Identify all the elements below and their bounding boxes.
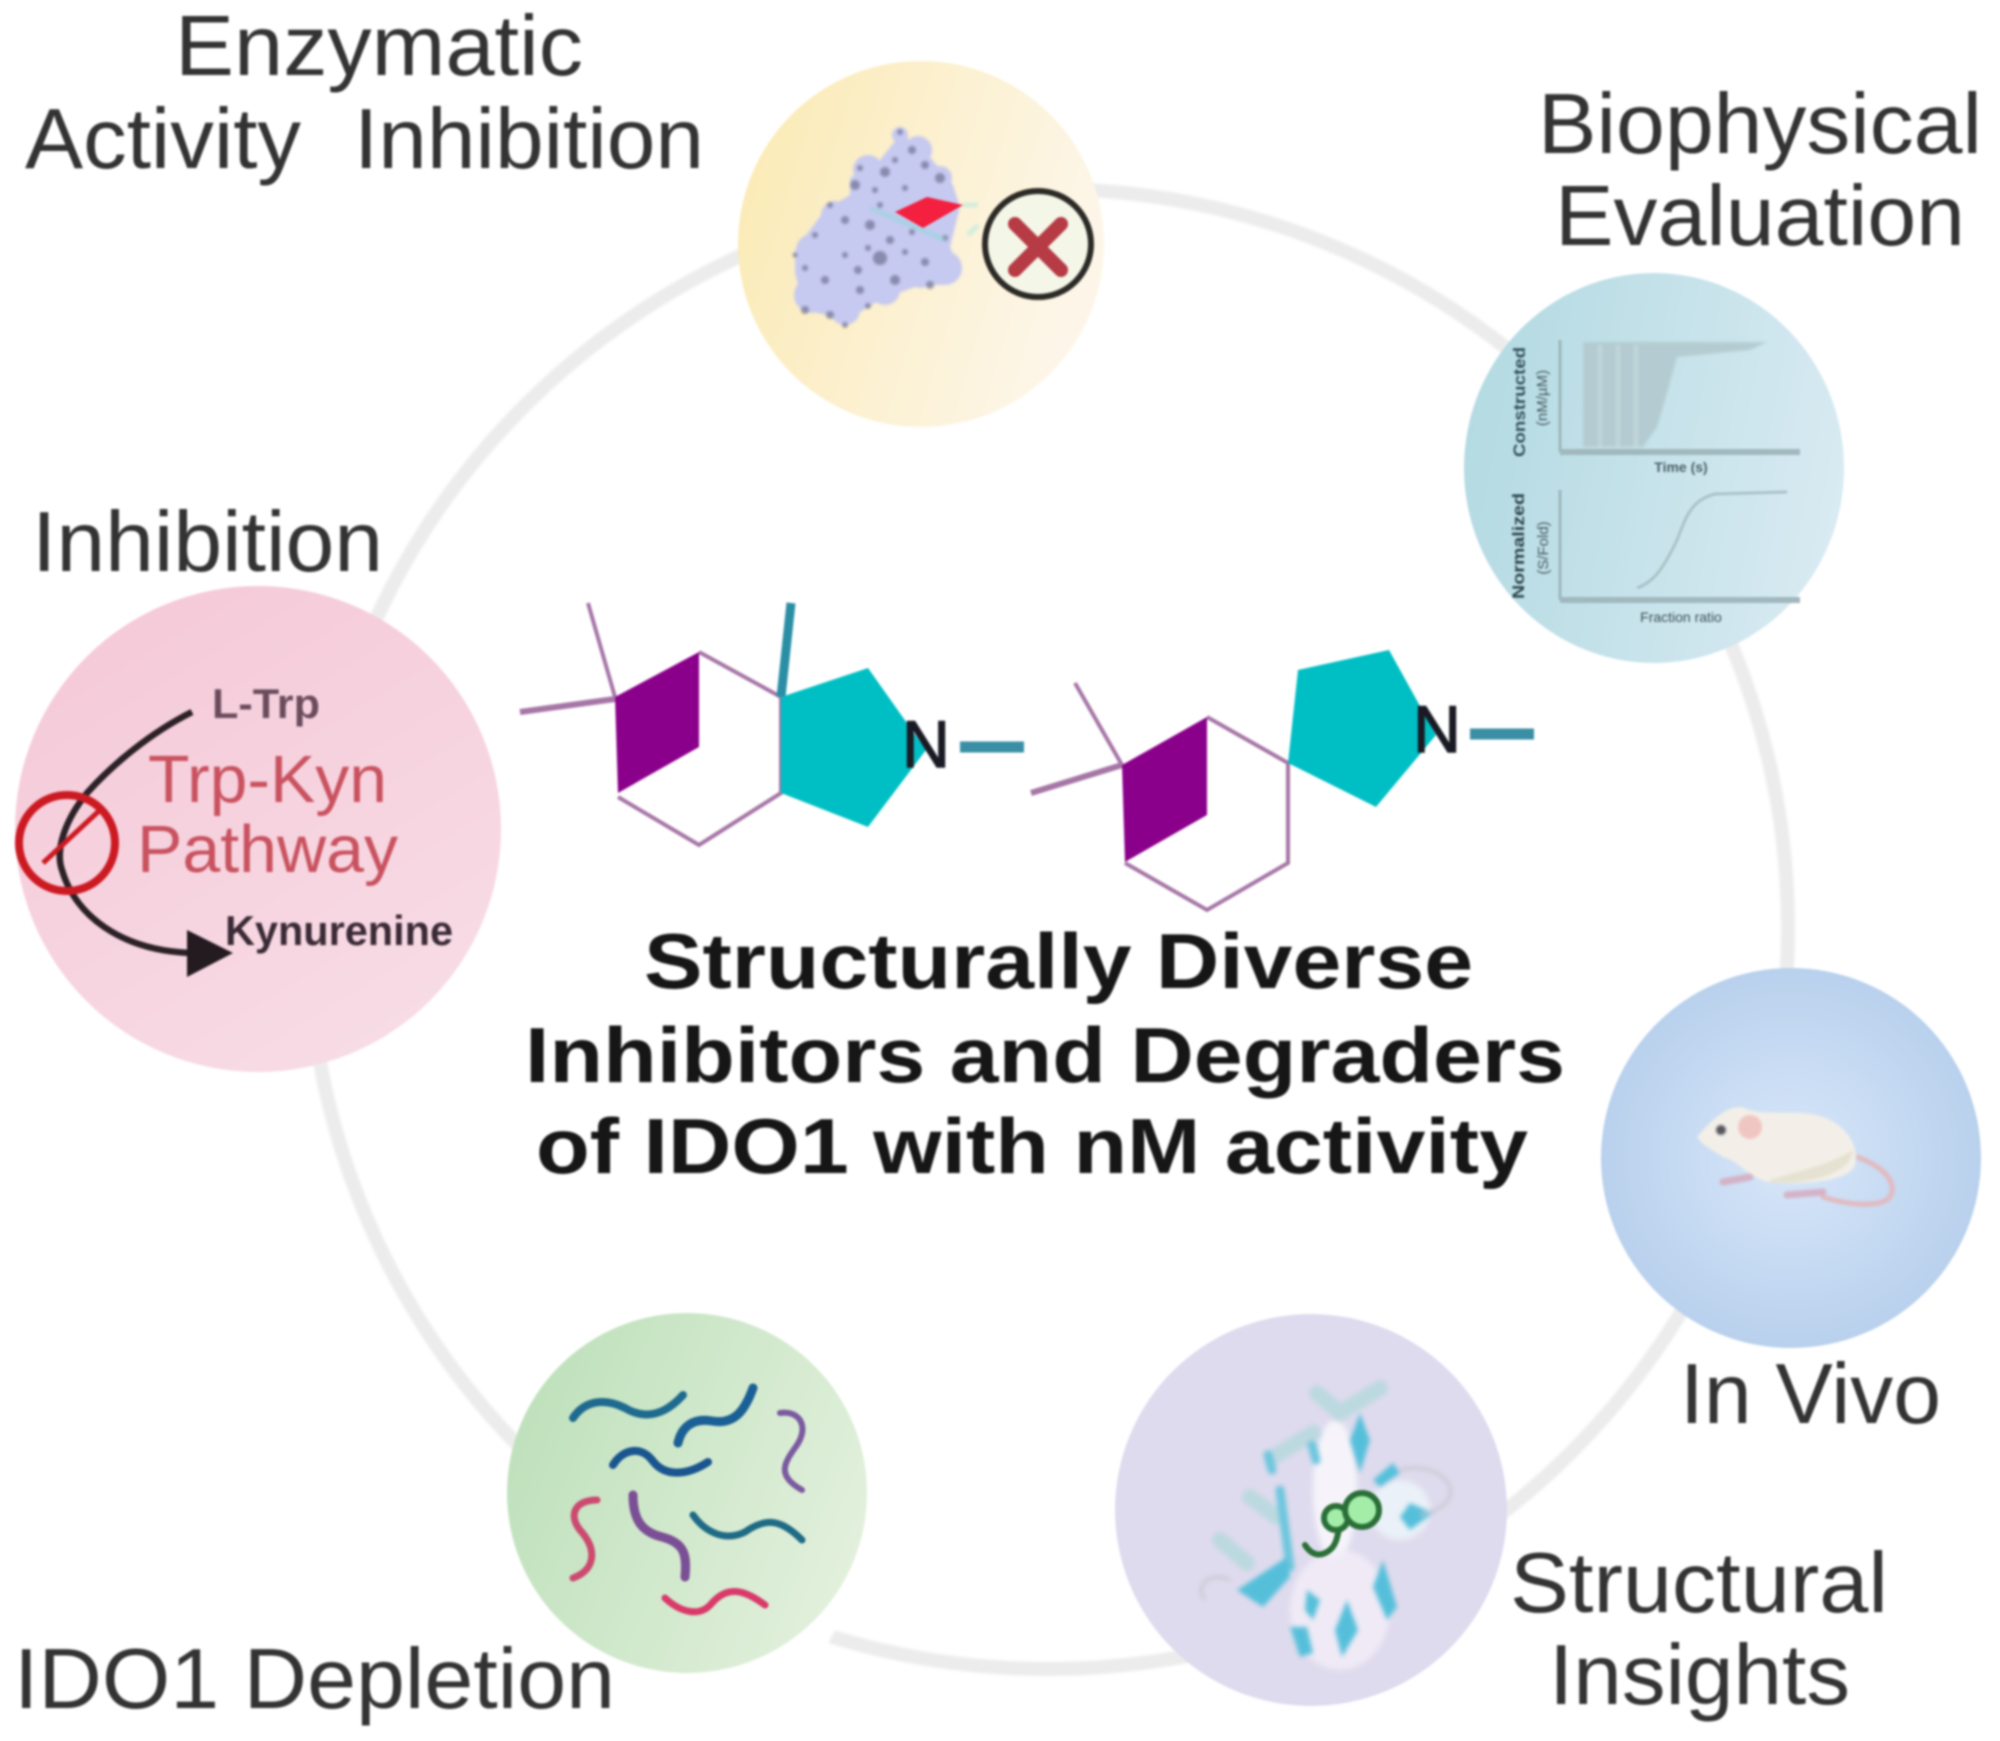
chemical structure: left molecule: N bbox=[902, 707, 950, 781]
label: Biophysical Evaluation bbox=[1538, 77, 1982, 264]
icon: peptide strands bbox=[573, 1388, 802, 1612]
panel: structural insights bbox=[1115, 1314, 1507, 1706]
chart: bar plot bbox=[1510, 340, 1800, 475]
icon: mouse bbox=[1697, 1107, 1892, 1204]
label: Enzymatic Activity Inhibition: Activity bbox=[25, 92, 302, 187]
chart: sigmoid curve: (S/Fold) bbox=[1535, 521, 1552, 575]
label: Enzymatic Activity Inhibition bbox=[25, 0, 704, 187]
icon: IDO1 protein surface bbox=[792, 127, 978, 328]
chart: bar plot: Time (s) bbox=[1654, 459, 1708, 475]
chart: bar plot: (nM/µM) bbox=[1534, 370, 1551, 426]
label: Biophysical Evaluation: Evaluation bbox=[1555, 169, 1965, 264]
chemical structure: right molecule: N bbox=[1413, 692, 1461, 766]
chemical structure: right molecule bbox=[1031, 650, 1534, 910]
central title: of IDO1 with nM activity bbox=[536, 1102, 1528, 1190]
chemical structure: left molecule bbox=[520, 603, 1024, 845]
label: Trp-Kyn Pathway: Pathway bbox=[137, 812, 398, 887]
chart: bar plot: Constructed bbox=[1510, 347, 1529, 457]
label: Inhibition: Inhibition bbox=[32, 495, 383, 590]
icon: blocked x mark bbox=[985, 191, 1091, 297]
chart: sigmoid curve bbox=[1509, 490, 1800, 625]
panel: biophysical evaluation bbox=[1464, 273, 1844, 663]
central title bbox=[525, 917, 1565, 1190]
cycle ring bbox=[308, 189, 1788, 1669]
icon: protein ribbon with ligand bbox=[1201, 1388, 1451, 1670]
arrow: L-Trp to Kynurenine bbox=[60, 712, 233, 977]
panel: IDO1 depletion bbox=[507, 1313, 867, 1673]
chart: sigmoid curve: Fraction ratio bbox=[1640, 609, 1722, 625]
label: Structural Insights: Insights bbox=[1549, 1628, 1850, 1723]
label: In Vivo: In Vivo bbox=[1680, 1347, 1941, 1442]
central title: Inhibitors and Degraders bbox=[525, 1011, 1565, 1099]
label: Biophysical Evaluation: Biophysical bbox=[1538, 77, 1982, 172]
panel: in vivo bbox=[1601, 968, 1981, 1348]
label: IDO1 Depletion: IDO1 Depletion bbox=[14, 1632, 615, 1727]
label: Kynurenine: Kynurenine bbox=[225, 907, 453, 954]
panel: enzymatic activity inhibition bbox=[738, 61, 1104, 427]
label: Trp-Kyn Pathway: Trp-Kyn bbox=[148, 742, 387, 817]
icon: inhibition symbol bbox=[19, 795, 115, 891]
panel: Trp-Kyn pathway inhibition bbox=[15, 586, 501, 1072]
chart: sigmoid curve: Normalized bbox=[1509, 493, 1528, 599]
label: Trp-Kyn Pathway bbox=[137, 742, 398, 887]
label: Structural Insights bbox=[1510, 1536, 1888, 1723]
label: Structural Insights: Structural bbox=[1510, 1536, 1888, 1631]
central title: Structurally Diverse bbox=[644, 917, 1473, 1005]
label: Enzymatic Activity Inhibition: Inhibition bbox=[354, 92, 704, 187]
label: Enzymatic Activity Inhibition: Enzymatic bbox=[175, 0, 583, 94]
label: L-Trp: L-Trp bbox=[212, 680, 320, 727]
